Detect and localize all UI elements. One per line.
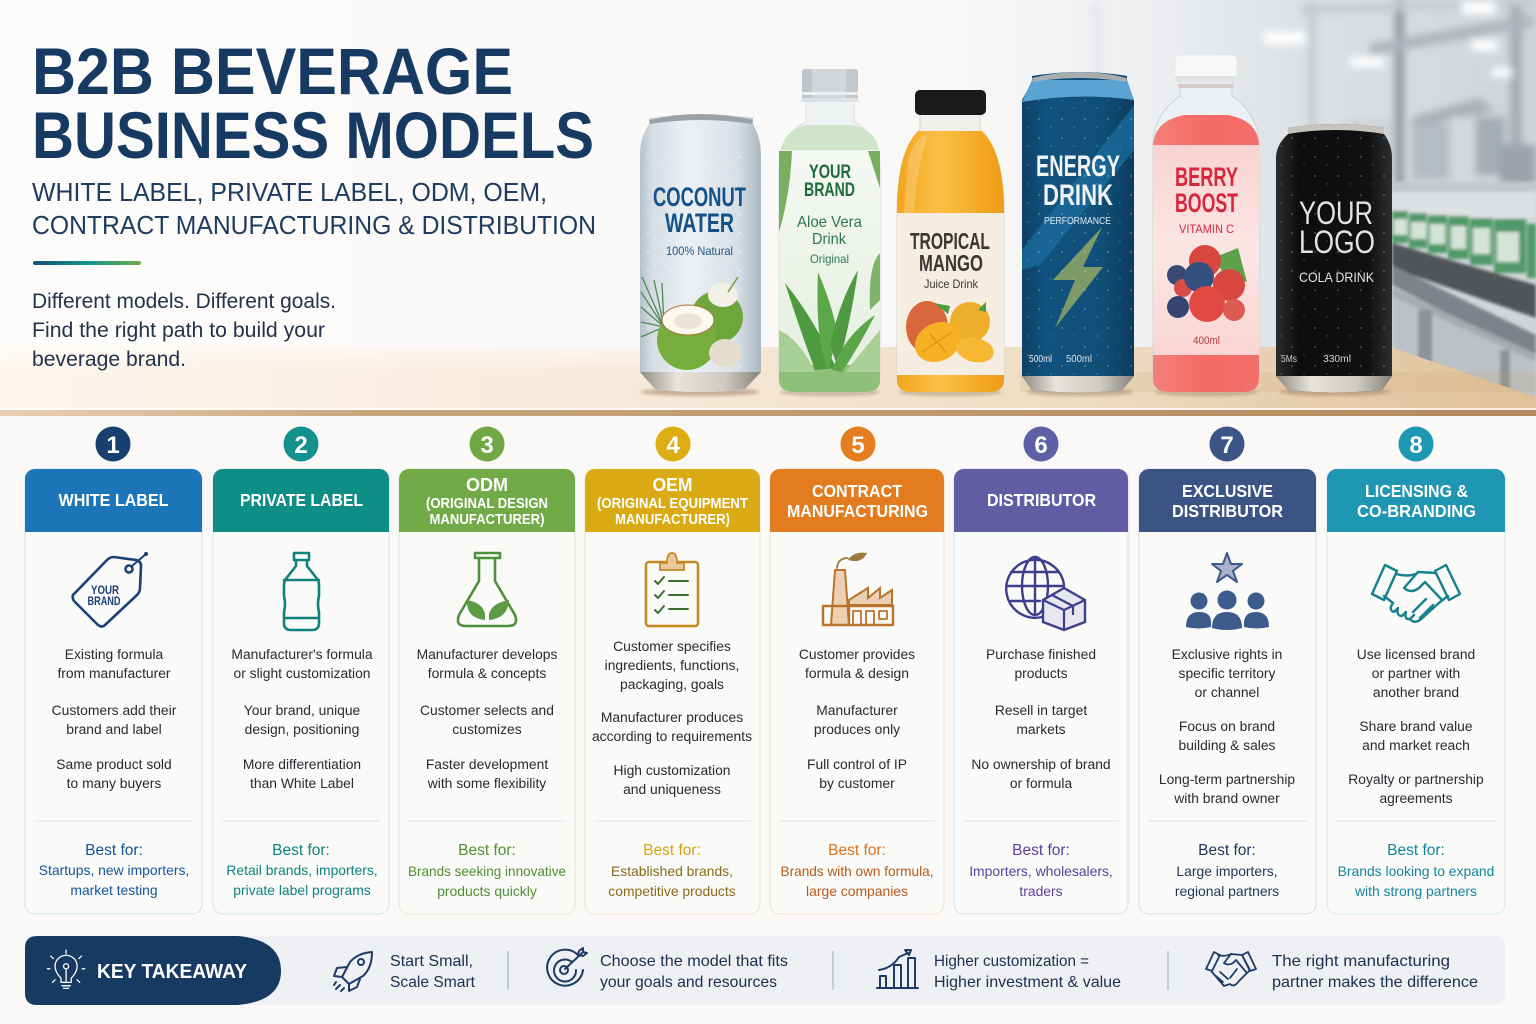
best for: exclusive distributor: Large importers, [1176,863,1278,879]
best for: private label: Retail brands, importers, [226,862,378,878]
icon: star and people [1186,553,1269,630]
product: tropical mango bottle [897,90,1004,396]
text: OEM description: packaging, goals [620,676,724,692]
header: licensing and co-branding: LICENSING & [1365,481,1468,501]
best for: exclusive distributor: Best for: [1198,842,1256,859]
best for: ODM: Best for: [458,842,516,859]
text: ODM description: with some flexibility [427,775,546,791]
text: ODM description: formula & concepts [428,665,546,681]
product: tropical mango bottle: Juice Drink [924,277,979,291]
text: licensing description: or partner with [1372,665,1460,681]
product: black cola can [1276,124,1392,396]
header: licensing and co-branding: CO-BRANDING [1357,501,1476,521]
takeaway: higher customization: Higher customization = [934,953,1089,970]
text: private label description: More differentiation [243,756,361,772]
text: ODM description: Manufacturer develops [417,646,557,662]
header: white label [25,469,202,532]
text: white label description: from manufacturer [57,665,171,681]
header: OEM: OEM [652,475,692,495]
text: exclusive distributor description: or channel [1195,684,1259,700]
best for: private label [226,842,378,898]
header: ODM: MANUFACTURER) [430,512,545,528]
product: berry boost bottle: BERRY [1175,162,1238,192]
text: licensing description [1348,646,1484,806]
text: exclusive distributor description: with brand owner [1173,790,1280,806]
key takeaway pill [25,936,281,1005]
text: private label description: than White Label [250,775,354,791]
text: distributor description [971,646,1111,791]
icon: factory [823,553,893,625]
product: coconut water can: WATER [665,208,734,238]
number badge 6: 6 [1034,432,1048,459]
product: black cola can: COLA DRINK [1299,269,1375,285]
icon: brand tag: BRAND [88,596,120,608]
icon: bottle [284,553,319,630]
text: licensing description: and market reach [1362,737,1470,753]
text: OEM description [592,638,752,797]
icon: clipboard checklist [646,553,698,626]
best for: private label: private label programs [233,882,371,898]
text: white label description [52,646,177,791]
text: contract manufacturing description [799,646,915,791]
tagline: beverage brand. [32,348,186,371]
text: white label description: Same product sold [56,756,172,772]
text: private label description [231,646,373,791]
header: contract manufacturing [770,469,944,532]
text: ODM description: Faster development [426,756,548,772]
text: private label description: or slight customization [234,665,370,681]
best for: private label: Best for: [272,842,330,859]
best for: OEM: Established brands, [611,863,733,879]
product: berry boost bottle: 400ml [1193,335,1220,347]
text: distributor description: or formula [1010,775,1072,791]
header: distributor: DISTRIBUTOR [987,490,1096,510]
product: energy drink can: 500ml [1029,353,1052,365]
panel: white label [25,426,202,914]
text: exclusive distributor description: Focus on brand [1179,718,1275,734]
panel: ODM [399,426,575,914]
text: private label description: Your brand, unique [244,702,361,718]
product: black cola can: 5Ms [1281,353,1297,365]
text: white label description: Existing formula [65,646,164,662]
subtitle: WHITE LABEL, PRIVATE LABEL, ODM, OEM, [32,177,547,207]
header: ODM [399,469,575,532]
text: licensing description: another brand [1373,684,1459,700]
header: private label [213,469,389,532]
product: tropical mango bottle: MANGO [919,250,983,276]
header: ODM: (ORIGINAL DESIGN [426,496,548,512]
product: aloe vera bottle: Drink [812,231,847,248]
product: energy drink can: DRINK [1043,179,1113,212]
best for: distributor: Importers, wholesalers, [969,863,1113,879]
best for: exclusive distributor [1175,842,1279,899]
product: berry boost bottle [1153,55,1259,396]
takeaway: higher customization [934,953,1121,991]
best for: contract manufacturing: large companies [806,883,908,899]
product: coconut water can [640,114,761,396]
takeaway: right partner: The right manufacturing [1272,953,1450,970]
text: distributor description: Purchase finished [986,646,1096,662]
product: aloe vera bottle: BRAND [804,180,855,201]
number badge 3 [470,426,504,462]
product: aloe vera bottle: YOUR [809,162,851,183]
icon: light bulb [47,950,85,988]
header: licensing and co-branding [1327,469,1505,532]
text: private label description: design, positioning [245,721,359,737]
text: distributor description: No ownership of brand [971,756,1111,772]
header: exclusive distributor: DISTRIBUTOR [1172,501,1283,521]
text: distributor description: markets [1016,721,1066,737]
header: distributor [954,469,1128,532]
best for: contract manufacturing: Best for: [828,842,886,859]
takeaway: start small [390,953,476,991]
text: white label description: brand and label [66,721,162,737]
text: OEM description: ingredients, functions, [605,657,739,673]
number badge 5 [840,426,876,462]
header: OEM [585,469,760,532]
number badge 1: 1 [106,432,120,459]
icon: handshake [1372,565,1460,622]
product: aloe vera bottle: Aloe Vera [797,214,862,231]
panel: contract manufacturing [770,426,944,914]
product: berry boost bottle: BOOST [1175,188,1238,218]
text: private label description: Manufacturer's formula [231,646,373,662]
number badge 6 [1024,426,1058,462]
best for: white label: market testing [70,882,158,898]
product: black cola can: YOUR [1299,195,1373,231]
key takeaway bar [25,936,1505,1005]
text: contract manufacturing description: Customer provides [799,646,915,662]
hero background with factory scene [0,0,1536,416]
title [32,34,594,172]
product: tropical mango bottle: TROPICAL [910,228,990,254]
takeaway: higher customization: Higher investment & value [934,974,1121,991]
text: contract manufacturing description: Manufacturer [816,702,898,718]
text: distributor description: products [1014,665,1068,681]
number badge 7: 7 [1220,432,1234,459]
product: coconut water can: COCONUT [653,182,746,212]
best for: ODM: Brands seeking innovative [408,863,566,879]
text: contract manufacturing description: produces only [814,721,900,737]
best for: distributor: Best for: [1012,842,1070,859]
product: aloe vera bottle: Original [810,252,849,266]
text: licensing description: Use licensed brand [1357,646,1475,662]
icon: rocket [334,952,372,991]
product: energy drink can: ENERGY [1036,150,1120,183]
panel: licensing and co-branding [1327,426,1505,914]
icon: brand tag [73,552,148,626]
best for: contract manufacturing [780,842,934,899]
text: ODM description [417,646,557,791]
best for: ODM: products quickly [437,883,537,899]
best for: OEM [608,842,736,899]
header: white label: WHITE LABEL [58,490,169,510]
text: exclusive distributor description: Exclusive rights in [1172,646,1282,662]
header: contract manufacturing: MANUFACTURING [787,501,928,521]
product: energy drink can: PERFORMANCE [1044,215,1111,227]
text: white label description: Customers add their [52,702,177,718]
best for: OEM: competitive products [608,883,736,899]
takeaway: start small: Start Small, [390,953,473,970]
title: B2B BEVERAGE [32,34,513,108]
title: BUSINESS MODELS [32,98,594,172]
icon: globe and box [1006,557,1085,630]
number badge 5: 5 [851,432,865,459]
tagline: Different models. Different goals. [32,290,336,313]
best for: exclusive distributor: regional partners [1175,883,1279,899]
text: distributor description: Resell in target [995,702,1087,718]
icon: growth chart [877,950,918,988]
header: ODM: ODM [466,475,508,495]
text: exclusive distributor description: specific territory [1179,665,1276,681]
text: white label description: to many buyers [67,775,161,791]
panel: exclusive distributor [1139,426,1316,914]
takeaway: choose the model: Choose the model that fits [600,953,788,970]
text: contract manufacturing description: by customer [819,775,895,791]
subtitle [32,177,596,240]
text: OEM description: and uniqueness [623,781,721,797]
header: private label: PRIVATE LABEL [240,490,363,510]
number badge 2: 2 [294,432,308,459]
text: licensing description: agreements [1379,790,1453,806]
key takeaway pill: KEY TAKEAWAY [97,961,248,983]
text: exclusive distributor description [1159,646,1295,806]
text: ODM description: customizes [452,721,522,737]
number badge 2 [284,426,318,462]
best for: licensing: Brands looking to expand [1338,863,1494,879]
panel: distributor [954,426,1128,914]
best for: white label: Startups, new importers, [39,862,189,878]
header: contract manufacturing: CONTRACT [812,481,902,501]
best for: contract manufacturing: Brands with own formula, [780,863,934,879]
best for: licensing: Best for: [1387,842,1445,859]
product: energy drink can: 500ml [1066,353,1092,365]
best for: white label [39,842,189,898]
icon: brand tag: YOUR [91,585,120,597]
subtitle: CONTRACT MANUFACTURING & DISTRIBUTION [32,210,596,240]
number badge 4: 4 [666,432,680,459]
text: ODM description: Customer selects and [420,702,554,718]
text: OEM description: High customization [614,762,730,778]
product: coconut water can: 100% Natural [666,244,733,258]
number badge 4 [656,426,690,462]
header: exclusive distributor [1139,469,1316,532]
takeaway: right partner: partner makes the difference [1272,974,1478,991]
header: OEM: MANUFACTURER) [615,512,730,528]
best for: ODM [408,842,566,899]
text: contract manufacturing description: Full control of IP [807,756,907,772]
wooden table [0,347,1536,410]
text: OEM description: according to requirements [592,728,752,744]
product: energy drink can [1022,72,1134,396]
icon: small handshake [1206,952,1256,986]
product: black cola can: 330ml [1323,353,1351,365]
best for: OEM: Best for: [643,842,701,859]
takeaway: choose the model [600,953,788,991]
text: contract manufacturing description: formula & design [805,665,909,681]
conveyor with green bottles [1392,182,1536,400]
product: berry boost bottle: VITAMIN C [1179,224,1234,236]
number badge 3: 3 [480,432,494,459]
text: exclusive distributor description: building & sales [1179,737,1276,753]
takeaway: start small: Scale Smart [390,974,476,991]
number badge 7 [1210,426,1244,462]
accent bar [33,261,141,265]
takeaway: choose the model: your goals and resources [600,974,777,991]
tagline: Find the right path to build your [32,319,325,342]
takeaway: right partner [1272,953,1478,991]
icon: flask with leaves [458,553,516,626]
text: OEM description: Customer specifies [613,638,731,654]
best for: distributor [969,842,1113,899]
panel: private label [213,426,389,914]
panel: OEM [585,426,760,914]
best for: distributor: traders [1019,883,1063,899]
text: licensing description: Royalty or partnership [1348,771,1484,787]
number badge 1 [96,426,130,462]
tagline [32,290,336,371]
text: licensing description: Share brand value [1359,718,1473,734]
number badge 8: 8 [1409,432,1423,459]
best for: licensing [1338,842,1494,899]
best for: white label: Best for: [85,842,143,859]
product: aloe vera bottle [779,69,880,396]
text: exclusive distributor description: Long-term partnership [1159,771,1295,787]
best for: licensing: with strong partners [1354,883,1477,899]
header: exclusive distributor: EXCLUSIVE [1182,481,1273,501]
header: OEM: (ORIGINAL EQUIPMENT [597,496,748,512]
text: OEM description: Manufacturer produces [601,709,743,725]
product: black cola can: LOGO [1299,224,1375,260]
icon: target [547,948,587,986]
number badge 8 [1398,426,1434,462]
